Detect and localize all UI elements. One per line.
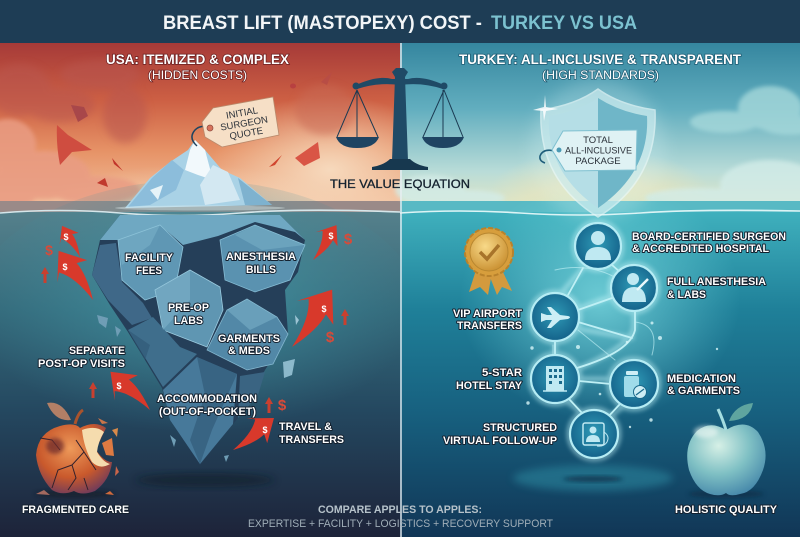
service labels: 5-STAR <box>482 367 522 379</box>
heading: Turkey: (HIGH STANDARDS) <box>542 68 659 82</box>
icon: gold quality badge <box>465 228 513 295</box>
rock: facility fees <box>118 225 183 300</box>
falling ice shards <box>97 315 299 462</box>
rock labels: & MEDS <box>228 345 270 357</box>
iceberg tip <box>115 140 285 210</box>
service labels: STRUCTURED <box>483 422 557 434</box>
label: travel and transfers: TRAVEL & <box>279 421 332 433</box>
red cost arrows <box>41 218 353 462</box>
sparkles <box>526 322 718 428</box>
node: doctor <box>575 223 621 269</box>
panel: Turkey background <box>395 43 800 537</box>
rock labels: PRE-OP <box>168 302 209 314</box>
node: anesthesia <box>611 265 657 311</box>
red cost arrows: $ <box>344 231 353 248</box>
rock labels: ACCOMMODATION <box>157 393 257 405</box>
service labels: HOTEL STAY <box>456 380 523 392</box>
node: medication <box>610 360 658 408</box>
price tag: initial surgeon quote: SURGEON <box>220 114 269 134</box>
header bar <box>0 0 800 43</box>
rock labels: BILLS <box>246 264 276 276</box>
price tag: initial surgeon quote: INITIAL <box>225 105 259 122</box>
iceberg underwater <box>92 215 305 465</box>
price tag: total all-inclusive package <box>540 130 637 171</box>
title: TURKEY VS USA <box>491 13 637 34</box>
red cost arrows: $ <box>321 304 327 314</box>
service labels: FULL ANESTHESIA <box>667 276 766 288</box>
heading: USA: USA: ITEMIZED & COMPLEX <box>106 52 289 67</box>
rock labels: GARMENTS <box>218 333 280 345</box>
icon: glass shield <box>530 80 666 220</box>
service labels: MEDICATION <box>667 373 736 385</box>
red cost arrows: $ <box>62 262 68 272</box>
label: travel and transfers <box>279 421 344 446</box>
red cost arrows: $ <box>45 242 53 258</box>
rock labels: LABS <box>174 315 203 327</box>
icon: healthy apple <box>687 403 766 498</box>
footer text <box>248 504 553 530</box>
icon: balance scale <box>336 68 464 170</box>
label: separate post-op visits: SEPARATE <box>69 345 125 357</box>
footer text: EXPERTISE + FACILITY + LOGISTICS + RECOVERY SUPPORT <box>248 518 553 530</box>
service labels: TRANSFERS <box>457 320 522 332</box>
rock labels <box>125 251 296 418</box>
icon: broken apple <box>35 403 119 498</box>
service labels: BOARD-CERTIFIED SURGEON <box>632 231 786 243</box>
footer text: COMPARE APPLES TO APPLES: <box>318 504 482 516</box>
rock labels: FEES <box>136 265 162 277</box>
service labels <box>443 231 786 447</box>
red cost arrows: $ <box>116 381 122 391</box>
label: separate post-op visits <box>38 345 125 370</box>
heading: Turkey: TURKEY: ALL-INCLUSIVE & TRANSPARENT <box>459 52 742 67</box>
title: BREAST LIFT (MASTOPEXY) COST - <box>163 13 487 34</box>
rock: left edge <box>92 243 152 325</box>
panel: USA background <box>0 43 450 537</box>
rock labels: ANESTHESIA <box>226 251 296 263</box>
rock: accommodation <box>163 357 237 464</box>
red cost arrows: $ <box>262 425 268 435</box>
rock: pre-op labs <box>155 270 223 347</box>
rock: lower left <box>128 317 197 387</box>
label: the value equation: THE VALUE EQUATION <box>330 177 470 191</box>
red cost arrows: $ <box>63 232 69 242</box>
service labels: VIP AIRPORT <box>453 308 522 320</box>
service labels: VIRTUAL FOLLOW-UP <box>443 435 557 447</box>
service labels: & ACCREDITED HOSPITAL <box>632 243 769 255</box>
label: travel and transfers: TRANSFERS <box>279 434 344 446</box>
node: airplane <box>531 293 579 341</box>
rock: anesthesia bills <box>220 225 305 292</box>
label: separate post-op visits: POST-OP VISITS <box>38 358 125 370</box>
node: hotel <box>531 355 579 403</box>
label: holistic quality: HOLISTIC QUALITY <box>675 504 778 516</box>
heading: USA: (HIDDEN COSTS) <box>148 68 247 82</box>
price tag: initial surgeon quote: QUOTE <box>229 126 264 142</box>
rock labels: FACILITY <box>125 252 174 264</box>
service labels: & LABS <box>667 289 706 301</box>
red cost arrows: $ <box>278 397 287 414</box>
price tag: initial surgeon quote <box>192 97 279 147</box>
rock: garments and meds <box>207 299 288 370</box>
heading: USA <box>106 52 289 82</box>
red cost arrows: $ <box>326 329 335 346</box>
label: fragmented care: FRAGMENTED CARE <box>22 504 129 516</box>
node: virtual follow-up <box>570 410 618 458</box>
price tag: total all-inclusive package: ALL-INCLUSIVE <box>565 146 632 156</box>
rock labels: (OUT-OF-POCKET) <box>159 406 256 418</box>
service labels: & GARMENTS <box>667 385 740 397</box>
network connections <box>530 222 659 459</box>
price tag: total all-inclusive package: PACKAGE <box>575 156 621 167</box>
price tag: total all-inclusive package: TOTAL <box>583 135 613 146</box>
divider <box>400 43 402 537</box>
red cost arrows: $ <box>328 231 334 241</box>
heading: Turkey <box>459 52 742 82</box>
